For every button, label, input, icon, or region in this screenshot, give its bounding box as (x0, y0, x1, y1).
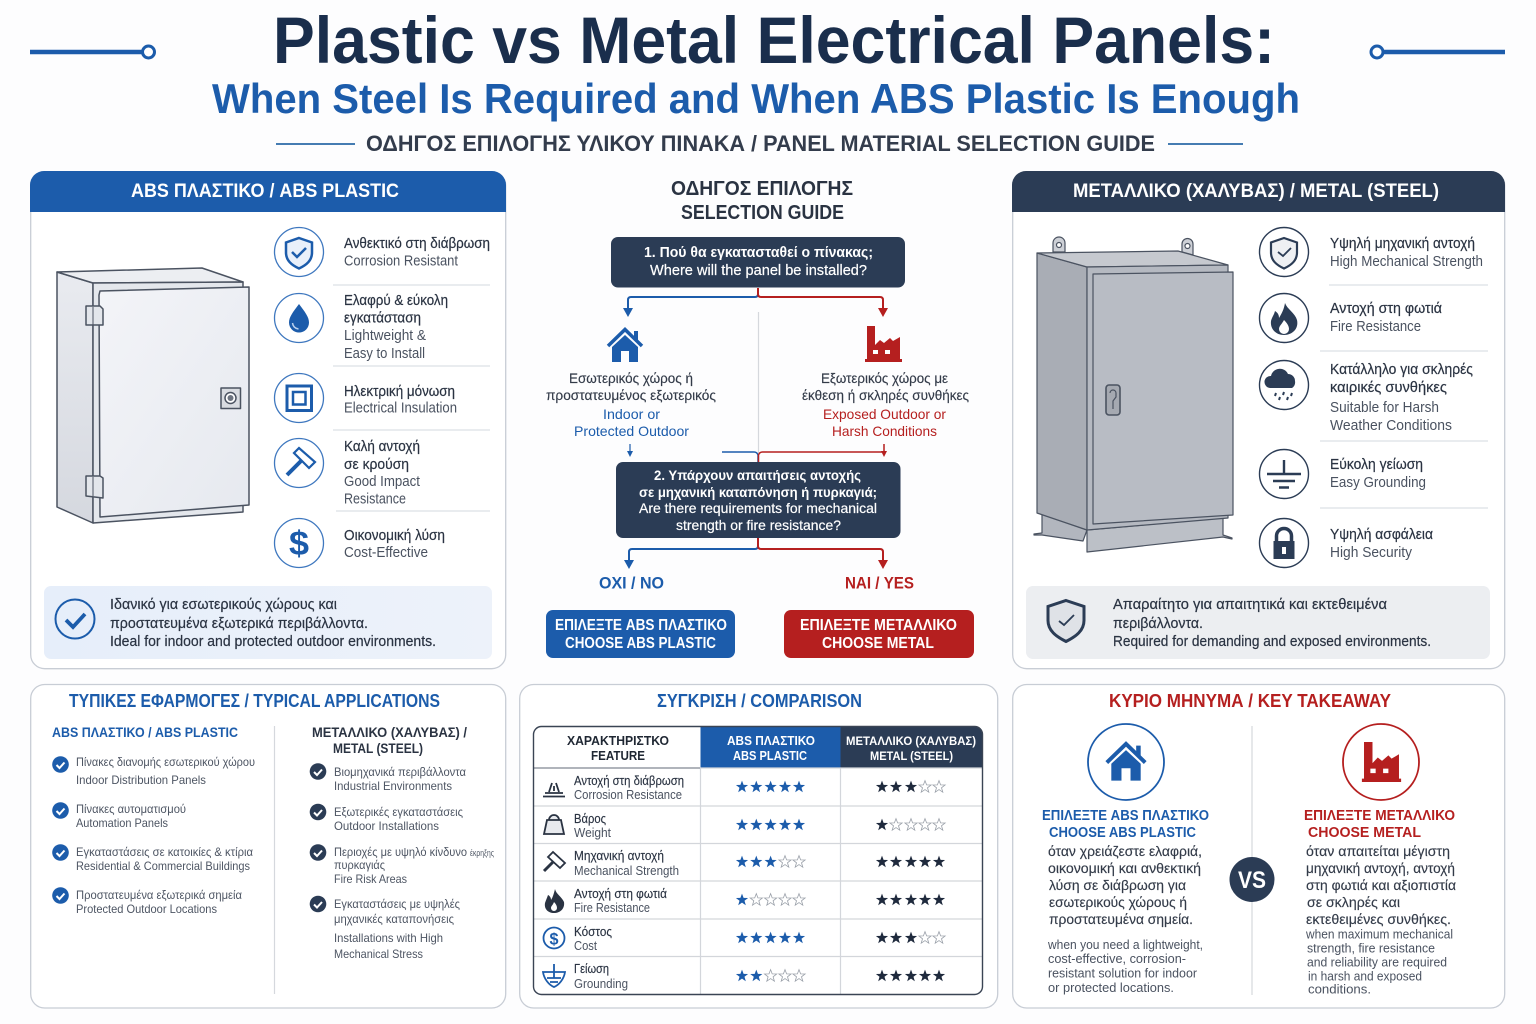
callout: ideal use for ABS (44, 586, 492, 659)
feature: high mechanical strength (1260, 228, 1483, 276)
panel: key takeaway (1013, 684, 1505, 1008)
option: exposed outdoor or harsh conditions (802, 370, 969, 439)
panel: comparison (520, 684, 998, 1008)
list item: protected outdoor (52, 887, 242, 916)
option: indoor or protected outdoor: Protected Outdoor (574, 423, 689, 439)
panel header: ABS plastic: ABS ΠΛΑΣΤΙΚΟ / ABS PLASTIC (131, 180, 399, 202)
subtitle: When Steel Is Required and When ABS Plastic Is Enough (212, 75, 1300, 122)
metal takeaway English text: when maximum mechanical (1305, 928, 1453, 942)
ABS takeaway Greek text (1048, 843, 1202, 927)
feature: impact resistance: Καλή αντοχή (344, 439, 420, 455)
feature: lightweight: Ελαφρύ & εύκολη (344, 293, 448, 309)
icon: house in circle (1088, 724, 1164, 800)
column: choose ABS plastic (1042, 724, 1209, 995)
feature: lightweight: Easy to Install (344, 346, 425, 362)
list item: industrial (310, 763, 466, 793)
ABS takeaway Greek text: προστατευμένα σημεία. (1049, 911, 1193, 927)
ABS takeaway English text (1047, 938, 1203, 995)
row: corrosion resistance (543, 774, 945, 802)
question 2 box: σε μηχανική καταπόνηση ή πυρκαγιά; (639, 484, 877, 500)
label: yes: ΝΑΙ / YES (845, 574, 914, 592)
choose metal label (1304, 808, 1455, 841)
list item: automation: Πίνακες αυτοματισμού (76, 802, 186, 816)
feature: impact resistance: Resistance (344, 492, 406, 508)
icon: factory (865, 326, 902, 362)
feature: corrosion resistant: Ανθεκτικό στη διάβρωση (344, 236, 490, 252)
feature: high mechanical strength: Υψηλή μηχανική αντοχή (1330, 236, 1475, 252)
badge: VS: VS (1238, 867, 1266, 894)
feature: high security: High Security (1330, 545, 1413, 561)
option: indoor or protected outdoor (546, 370, 716, 439)
table header: ABS plastic: ABS PLASTIC (733, 749, 807, 763)
list item: mechanical stress: Εγκαταστάσεις με υψηλές (334, 897, 460, 911)
panel: metal steel (1012, 171, 1505, 669)
feature: fire resistance: Αντοχή στη φωτιά (1330, 301, 1442, 317)
feature: cost-effective: Οικονομική λύση (344, 528, 445, 544)
metal takeaway English text: strength, fire resistance (1307, 942, 1435, 956)
option: indoor or protected outdoor: Indoor or (603, 406, 660, 422)
question 1 box: Where will the panel be installed? (650, 263, 867, 279)
row: corrosion resistance: Corrosion Resistance (574, 788, 682, 802)
question 1 box: 1. Πού θα εγκατασταθεί ο πίνακας; (644, 245, 873, 261)
button: choose ABS plastic: CHOOSE ABS PLASTIC (565, 635, 716, 652)
choose metal label: ΕΠΙΛΕΞΤΕ ΜΕΤΑΛΛΙΚΟ (1304, 808, 1455, 824)
list item: mechanical stress (310, 896, 460, 961)
option: exposed outdoor or harsh conditions: Εξωτερικός χώρος με (821, 370, 948, 386)
question 2 box: strength or fire resistance? (676, 517, 841, 533)
row: cost (544, 925, 945, 953)
table header: metal: ΜΕΤΑΛΛΙΚΟ (ΧΑΛΥΒΑΣ) (846, 734, 976, 748)
feature: corrosion resistant (274, 228, 490, 276)
list item: fire risk: Περιοχές με υψηλό κίνδυνο (334, 845, 467, 859)
feature: impact resistance: Good Impact (344, 474, 420, 490)
panel heading: comparison: ΣΥΓΚΡΙΣΗ / COMPARISON (657, 691, 862, 711)
list item: protected outdoor: Προστατευμένα εξωτερικά σημεία (76, 888, 242, 902)
metal takeaway Greek text: σε σκληρές και (1307, 894, 1400, 910)
label: no: ΟΧΙ / NO (599, 574, 664, 592)
feature: easy grounding: Easy Grounding (1330, 475, 1426, 491)
flowchart heading: ΟΔΗΓΟΣ ΕΠΙΛΟΓΗΣ (671, 178, 853, 200)
feature: fire resistance (1260, 294, 1442, 342)
feature: harsh weather: Suitable for Harsh (1330, 400, 1439, 416)
row: cost: Cost (574, 939, 597, 953)
ABS takeaway Greek text: οικονομική και ανθεκτική (1048, 860, 1201, 876)
option: indoor or protected outdoor: προστατευμένος εξωτερικός (546, 387, 716, 403)
question 1 box (611, 237, 905, 288)
feature: impact resistance: σε κρούση (344, 457, 409, 473)
feature: harsh weather: Weather Conditions (1330, 418, 1452, 434)
row: weight (544, 812, 945, 840)
ABS takeaway English text: or protected locations. (1048, 981, 1174, 995)
row: weight: Weight (574, 826, 611, 840)
metal takeaway English text: in harsh and exposed (1308, 970, 1422, 984)
feature: cost-effective: $ (289, 525, 309, 563)
callout: required for demanding environments: Απαραίτητο για απαιτητικά και εκτεθειμένα (1113, 597, 1387, 613)
arrow: question 2 no (624, 538, 758, 569)
metal takeaway English text: and reliability are required (1307, 956, 1447, 970)
column: metal applications: METAL (STEEL) (333, 741, 423, 756)
metal takeaway Greek text: στη φωτιά και αξιοπιστία (1306, 877, 1456, 893)
feature: electrical insulation (274, 374, 457, 422)
list item: fire risk: έκρηξης (470, 848, 494, 858)
feature: corrosion resistant: Corrosion Resistant (344, 254, 458, 270)
feature: lightweight: Lightweight & (344, 328, 426, 344)
list item: automation: Automation Panels (76, 816, 168, 830)
choose ABS label: CHOOSE ABS PLASTIC (1049, 825, 1196, 841)
arrow: indoor to question 2 (627, 444, 758, 462)
feature: easy grounding (1260, 450, 1426, 498)
list item: mechanical stress: Installations with High (334, 931, 443, 945)
button: choose metal: ΕΠΙΛΕΞΤΕ ΜΕΤΑΛΛΙΚΟ (800, 617, 957, 634)
arrow: question 1 to outdoor (758, 288, 888, 317)
row: cost: Κόστος (574, 925, 612, 939)
feature: electrical insulation: Electrical Insulation (344, 400, 457, 416)
list item: indoor distribution (52, 755, 255, 787)
feature: impact resistance (274, 438, 420, 508)
callout: required for demanding environments (1026, 586, 1490, 659)
question 2 box: 2. Υπάρχουν απαιτήσεις αντοχής (654, 467, 861, 483)
panel header: metal steel: ΜΕΤΑΛΛΙΚΟ (ΧΑΛΥΒΑΣ) / METAL (STEEL) (1073, 180, 1439, 202)
row: cost: $ (550, 930, 559, 948)
row: grounding: Grounding (574, 977, 628, 991)
table header: feature: FEATURE (591, 749, 645, 763)
row: fire resistance: Αντοχή στη φωτιά (574, 887, 667, 901)
panel: typical applications (31, 684, 506, 1008)
title block (212, 3, 1300, 156)
list item: mechanical stress: Mechanical Stress (334, 947, 423, 961)
row: weight: Βάρος (574, 812, 606, 826)
row: grounding: Γείωση (574, 962, 609, 976)
ABS takeaway English text: when you need a lightweight, (1047, 938, 1203, 952)
list item: outdoor: Εξωτερικές εγκαταστάσεις (334, 805, 463, 819)
list item: fire risk: πυρκαγιάς (334, 858, 385, 872)
ABS takeaway Greek text: όταν χρειάζεστε ελαφριά, (1048, 843, 1202, 859)
option: exposed outdoor or harsh conditions: Harsh Conditions (832, 423, 937, 439)
guide strapline: ΟΔΗΓΟΣ ΕΠΙΛΟΓΗΣ ΥΛΙΚΟΥ ΠΙΝΑΚΑ / PANEL MATERIAL SELECTION GUIDE (366, 131, 1155, 156)
main title: Plastic vs Metal Electrical Panels: (273, 3, 1275, 77)
button: choose ABS plastic: ΕΠΙΛΕΞΤΕ ABS ΠΛΑΣΤΙΚΟ (555, 617, 727, 634)
flowchart heading (671, 178, 853, 224)
list item: fire risk (310, 844, 494, 886)
choose ABS label: ΕΠΙΛΕΞΤΕ ABS ΠΛΑΣΤΙΚΟ (1042, 808, 1209, 824)
selection guide flowchart (546, 178, 974, 658)
column: metal applications (310, 725, 494, 961)
choose metal label: CHOOSE METAL (1308, 825, 1421, 841)
feature: high security: Υψηλή ασφάλεια (1330, 527, 1433, 543)
column: ABS plastic applications: ABS ΠΛΑΣΤΙΚΟ / ABS PLASTIC (52, 725, 238, 740)
metal takeaway English text (1305, 928, 1453, 996)
table header: feature (567, 734, 669, 763)
list item: indoor distribution: Πίνακες διανομής εσωτερικού χώρου (76, 755, 255, 769)
callout: required for demanding environments: περιβάλλοντα. (1113, 616, 1203, 632)
column: choose metal (1304, 724, 1456, 996)
list item: automation (52, 802, 186, 830)
ABS takeaway Greek text: λύση σε διάβρωση για (1049, 877, 1186, 893)
list item: mechanical stress: μηχανικές καταπονήσεις (334, 912, 454, 926)
list item: indoor distribution: Indoor Distribution Panels (76, 773, 206, 787)
panel heading: typical applications: ΤΥΠΙΚΕΣ ΕΦΑΡΜΟΓΕΣ / TYPICAL APPLICATIONS (69, 691, 440, 711)
table header: feature: ΧΑΡΑΚΤΗΡΙΣΤΚΟ (567, 734, 669, 748)
arrow: question 2 yes (758, 538, 888, 569)
illustration: ABS plastic enclosure (57, 268, 249, 523)
callout: ideal use for ABS: προστατευμένα εξωτερικά περιβάλλοντα. (110, 616, 368, 632)
list item: outdoor: Outdoor Installations (334, 819, 439, 833)
icon: factory in circle (1343, 724, 1419, 800)
row: corrosion resistance: Αντοχή στη διάβρωση (574, 774, 684, 788)
feature: fire resistance: Fire Resistance (1330, 319, 1421, 335)
option: exposed outdoor or harsh conditions: Exposed Outdoor or (823, 406, 946, 422)
feature: high mechanical strength: High Mechanical Strength (1330, 254, 1483, 270)
panel header: ABS plastic (30, 171, 506, 212)
panel: ABS plastic (30, 171, 506, 669)
button: choose metal (784, 610, 974, 658)
button: choose ABS plastic (546, 610, 735, 658)
comparison table (534, 726, 983, 994)
metal takeaway Greek text: μηχανική αντοχή, αντοχή (1306, 860, 1455, 876)
feature: high security (1260, 518, 1433, 568)
list item: residential (52, 844, 253, 873)
metal takeaway English text: conditions. (1308, 982, 1371, 996)
feature: cost-effective: Cost-Effective (344, 545, 428, 561)
table header: ABS plastic (700, 726, 840, 768)
table header: ABS plastic: ABS ΠΛΑΣΤΙΚΟ (727, 734, 815, 748)
table header: metal: METAL (STEEL) (870, 749, 953, 763)
option: indoor or protected outdoor: Εσωτερικός χώρος ή (569, 370, 693, 386)
column: metal applications: ΜΕΤΑΛΛΙΚΟ (ΧΑΛΥΒΑΣ) / (312, 725, 467, 740)
choose ABS label (1042, 808, 1209, 841)
list item: residential: Residential & Commercial Buildings (76, 859, 250, 873)
feature: easy grounding: Εύκολη γείωση (1330, 457, 1423, 473)
arrow: question 1 to indoor (623, 288, 758, 317)
option: exposed outdoor or harsh conditions: έκθεση ή σκληρές συνθήκες (802, 387, 969, 403)
table header: metal (840, 726, 983, 768)
question 2 box (616, 462, 900, 538)
row: fire resistance: Fire Resistance (574, 901, 650, 915)
callout: ideal use for ABS: Ιδανικό για εσωτερικούς χώρους και (110, 597, 337, 613)
row: mechanical strength: Μηχανική αντοχή (574, 849, 664, 863)
callout: required for demanding environments: Required for demanding and exposed environments. (1113, 634, 1431, 650)
list item: residential: Εγκαταστάσεις σε κατοικίες & κτίρια (76, 845, 253, 859)
row: mechanical strength: Mechanical Strength (574, 864, 679, 878)
list item: fire risk: Fire Risk Areas (334, 872, 407, 886)
panel heading: key takeaway: ΚΥΡΙΟ ΜΗΝΥΜΑ / KEY TAKEAWAY (1109, 691, 1391, 711)
feature: electrical insulation: Ηλεκτρική μόνωση (344, 384, 455, 400)
badge: VS (1230, 857, 1274, 902)
arrow: outdoor to question 2 (758, 444, 887, 462)
ABS takeaway English text: resistant solution for indoor (1048, 966, 1197, 980)
list item: industrial: Βιομηχανικά περιβάλλοντα (334, 765, 466, 779)
flowchart heading: SELECTION GUIDE (681, 202, 844, 224)
list item: protected outdoor: Protected Outdoor Locations (76, 902, 217, 916)
icon: house (608, 330, 642, 362)
metal takeaway Greek text (1306, 843, 1456, 927)
metal takeaway Greek text: όταν απαιτείται μέγιστη (1306, 843, 1450, 859)
feature: lightweight: εγκατάσταση (344, 310, 421, 326)
list item: industrial: Industrial Environments (334, 779, 452, 793)
feature: harsh weather: Κατάλληλο για σκληρές (1330, 362, 1473, 378)
metal takeaway Greek text: εκτεθειμένες συνθήκες. (1306, 911, 1451, 927)
illustration: steel enclosure (1034, 237, 1233, 552)
feature: lightweight (274, 293, 448, 362)
row: fire resistance (545, 887, 945, 915)
button: choose metal: CHOOSE METAL (822, 635, 934, 652)
list item: outdoor (310, 804, 463, 833)
row: grounding (543, 962, 945, 991)
callout: ideal use for ABS: Ideal for indoor and protected outdoor environments. (110, 634, 436, 650)
question 2 box: Are there requirements for mechanical (639, 500, 877, 516)
row: mechanical strength (544, 849, 945, 878)
column: ABS plastic applications (52, 725, 255, 916)
ABS takeaway English text: cost-effective, corrosion- (1048, 952, 1186, 966)
panel header: metal steel (1012, 171, 1505, 212)
ABS takeaway Greek text: εσωτερικούς χώρους ή (1049, 894, 1187, 910)
feature: harsh weather (1260, 360, 1473, 434)
feature: cost-effective (274, 518, 445, 568)
feature: harsh weather: καιρικές συνθήκες (1330, 380, 1447, 396)
